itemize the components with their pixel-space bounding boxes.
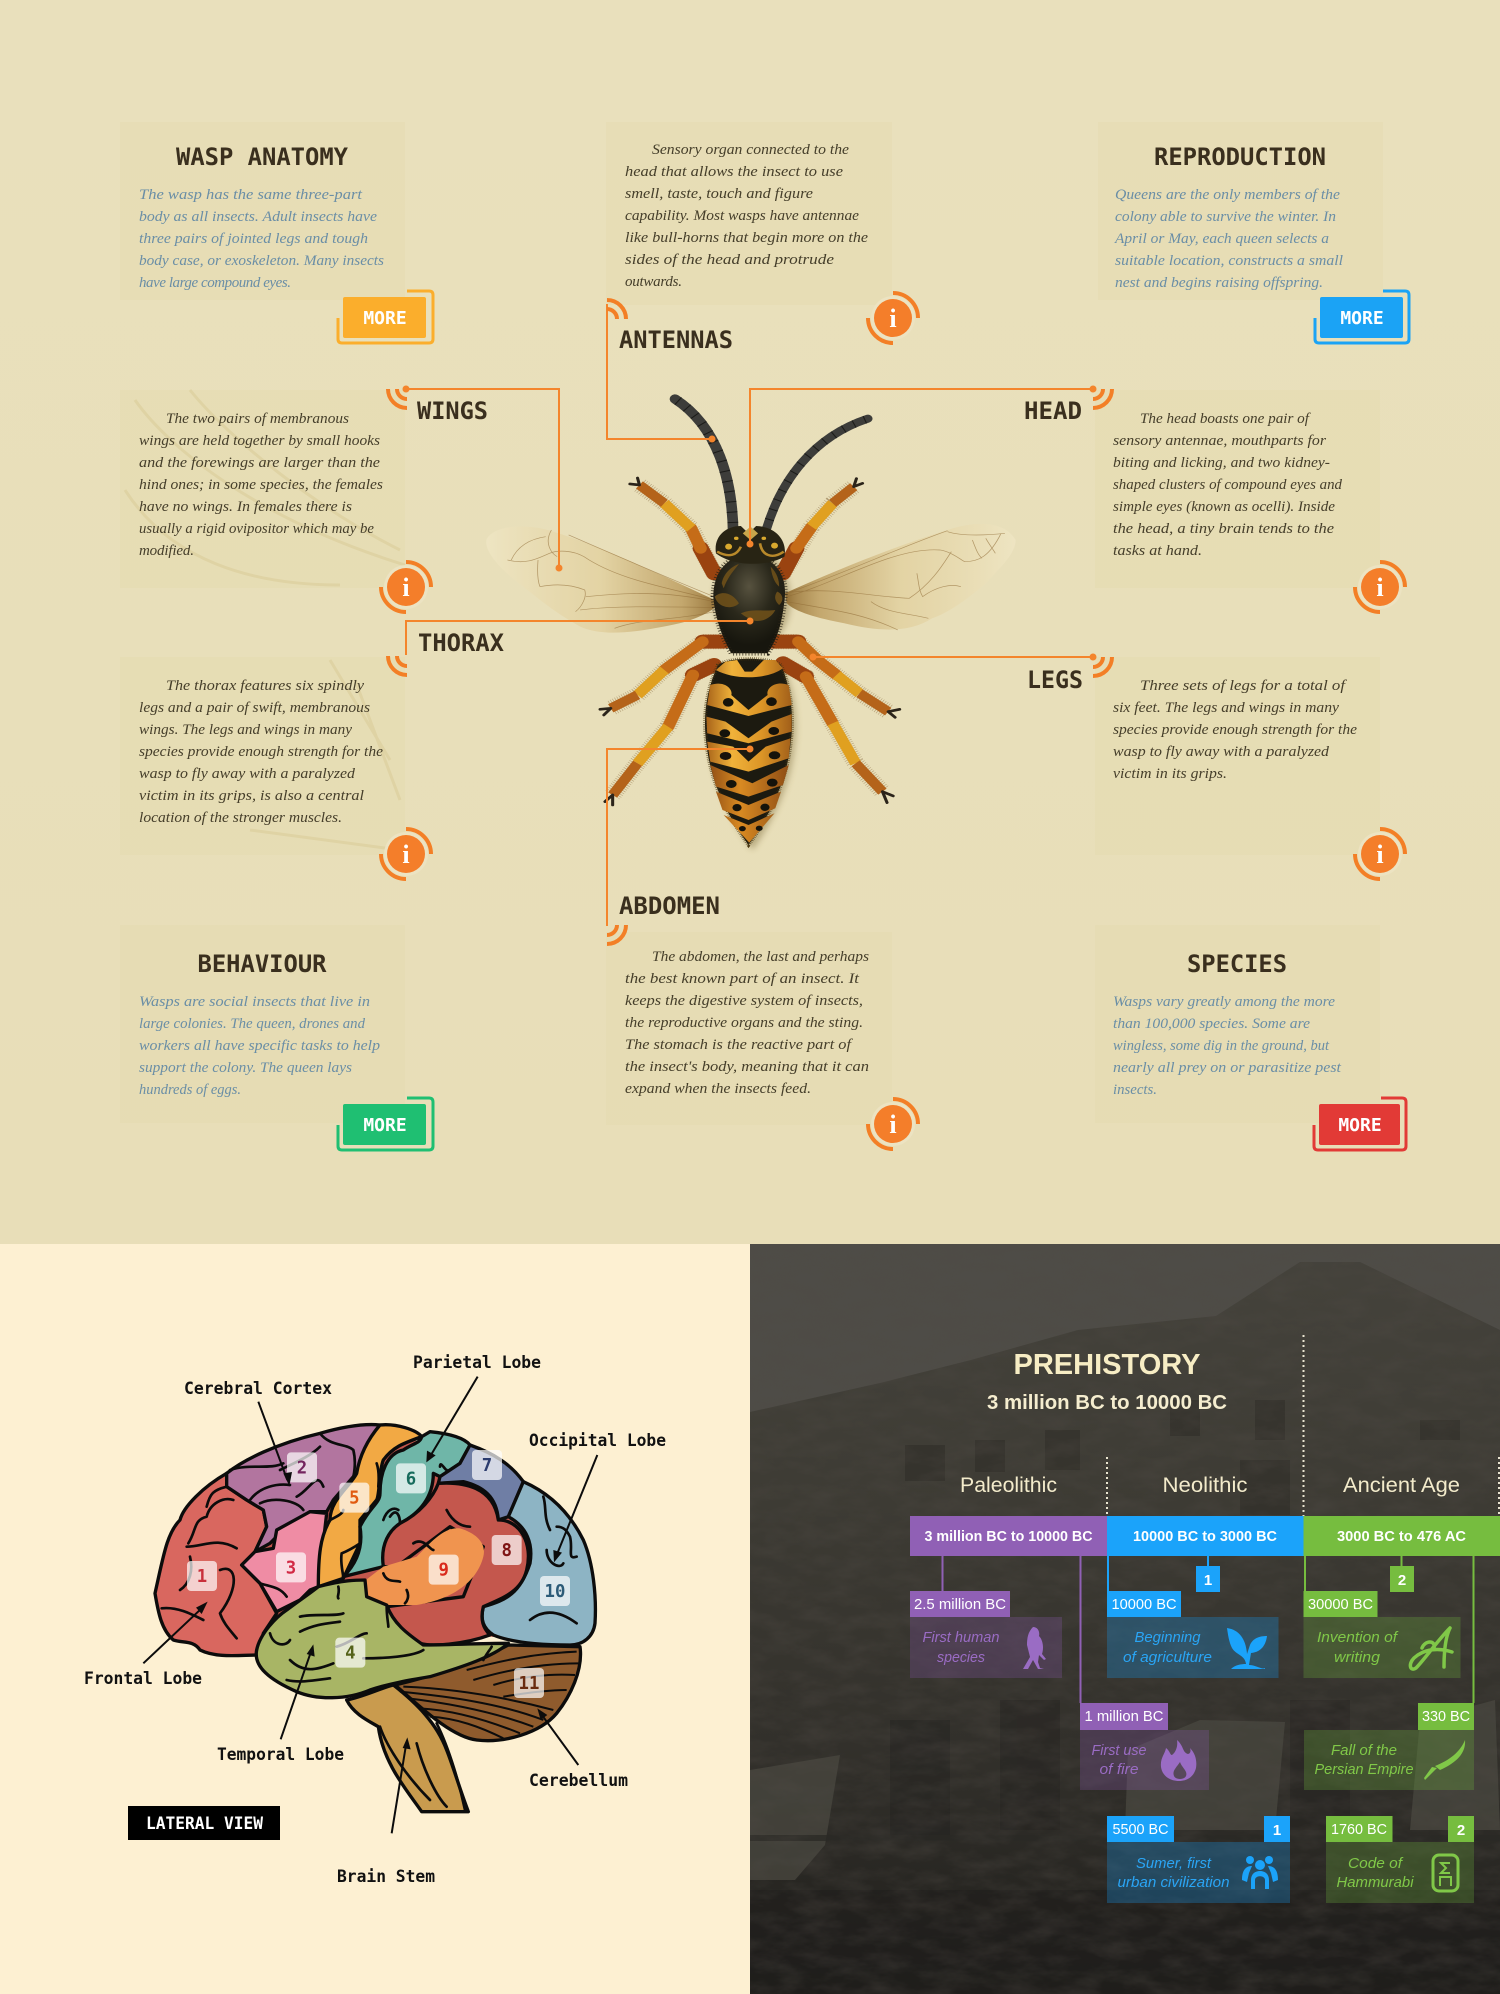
pink region: [242, 1512, 327, 1612]
text: abdomen: the reproductive organs and the sting.: [625, 1015, 863, 1031]
text: head: The head boasts one pair of: [1140, 411, 1311, 427]
head: [716, 526, 785, 564]
labels: brain parts: Occipital Lobe: [529, 1431, 666, 1450]
teal region: [343, 1432, 470, 1577]
text: species: insects.: [1113, 1082, 1157, 1098]
leader line: abdomen: [607, 746, 754, 944]
number tags: 6: [406, 1469, 416, 1489]
event: writing: 30000 BC: [1308, 1597, 1373, 1613]
text: abdomen: the insect's body, meaning that it can: [625, 1059, 869, 1075]
red parietal region: [383, 1483, 528, 1645]
labels: brain parts: Brain Stem: [337, 1867, 435, 1886]
text: antennas: smell, taste, touch and figure: [625, 186, 813, 202]
event: first human species: [910, 1591, 1062, 1678]
event: persian empire: [1304, 1703, 1474, 1790]
text: legs: victim in its grips.: [1113, 766, 1227, 782]
text: antennas: Sensory organ connected to the: [652, 142, 849, 158]
text: abdomen: the best known part of an insect. It: [625, 971, 860, 987]
text: antennas: sides of the head and protrude: [625, 252, 834, 268]
text: behaviour: Wasps are social insects that live in: [139, 994, 370, 1010]
text: abdomen: The abdomen, the last and perhaps: [652, 949, 869, 965]
text: species: nearly all prey on or parasitize pest: [1113, 1060, 1342, 1076]
icon: sword: [1424, 1740, 1465, 1780]
badge: lateral view: [128, 1806, 280, 1840]
text: thorax: victim in its grips, is also a central: [139, 788, 364, 804]
label: wings: WINGS: [417, 397, 488, 425]
illustration: wasp: [486, 399, 1016, 851]
button: more blue: MORE: [1340, 308, 1384, 329]
event: sumer: urban civilization: [1118, 1875, 1230, 1891]
event: sumer: [1107, 1816, 1290, 1903]
text: reproduction: colony able to survive the winter. In: [1115, 209, 1336, 225]
text: thorax: wings. The legs and wings in many: [139, 722, 352, 738]
event: writing: writing: [1334, 1650, 1380, 1666]
icon: head signal: [1093, 389, 1112, 408]
labels: brain parts: Frontal Lobe: [84, 1669, 202, 1688]
right wing: [785, 524, 1016, 630]
label: head: HEAD: [1024, 397, 1082, 425]
text: behaviour: workers all have specific tasks to help: [139, 1038, 381, 1054]
label: abdomen: ABDOMEN: [619, 892, 720, 920]
number box 1b: [1264, 1816, 1290, 1842]
slate region: [438, 1445, 523, 1520]
icon: info head: [1355, 562, 1405, 612]
icon: info antennas: i: [889, 304, 897, 333]
green temporal region: [256, 1580, 508, 1698]
labels: brain parts: Cerebral Cortex: [184, 1379, 332, 1398]
event: first human species: First human: [922, 1630, 1000, 1646]
icon: info legs: [1355, 829, 1405, 879]
text: wings: modified.: [139, 543, 194, 559]
leader line: thorax: [388, 618, 754, 675]
icon: info abdomen: i: [889, 1110, 897, 1139]
icon: info abdomen: [868, 1099, 918, 1149]
number box 1: 1: [1204, 1572, 1212, 1589]
button: more orange: [338, 291, 433, 343]
event: writing: [1304, 1591, 1460, 1678]
event: hammurabi: 1760 BC: [1331, 1822, 1387, 1838]
icon: info thorax: i: [402, 840, 410, 869]
text: wings: and the forewings are larger than the: [139, 455, 380, 471]
heading: wasp anatomy: WASP ANATOMY: [176, 143, 349, 171]
icon: legs signal: [1093, 657, 1112, 676]
number box 2: 2: [1398, 1572, 1406, 1589]
number tags: 4: [345, 1644, 356, 1664]
text: legs: six feet. The legs and wings in many: [1113, 700, 1339, 716]
panel: wings text card: [120, 390, 405, 588]
text: head: biting and licking, and two kidney-: [1113, 455, 1330, 471]
event: hammurabi: [1326, 1816, 1474, 1903]
timeline: neolithic: 10000 BC to 3000 BC: [1133, 1529, 1278, 1545]
text: behaviour: support the colony. The queen lays: [139, 1060, 352, 1076]
text: behaviour: [139, 994, 381, 1098]
heading: species: SPECIES: [1187, 950, 1287, 978]
text: wasp anatomy intro: body case, or exoskeleton. Many insects: [139, 253, 384, 269]
text: species: [1113, 994, 1342, 1098]
number box 2b: 2: [1457, 1822, 1465, 1839]
timeline: paleolithic: [910, 1516, 1209, 1790]
number tags: [187, 1450, 570, 1698]
button: more green: MORE: [363, 1115, 407, 1136]
number tags: 5: [349, 1489, 360, 1509]
button: more red: [1314, 1098, 1406, 1150]
heading: reproduction: REPRODUCTION: [1154, 143, 1326, 171]
button: more green: [338, 1098, 433, 1150]
label: thorax: THORAX: [418, 629, 505, 657]
brain stem: [347, 1685, 468, 1812]
left wing: [486, 526, 716, 633]
text: abdomen: expand when the insects feed.: [625, 1081, 811, 1097]
event: hammurabi: Hammurabi: [1336, 1875, 1414, 1891]
panel: brain background: [0, 1244, 750, 1994]
labels: brain parts: [84, 1353, 666, 1886]
text: wings: The two pairs of membranous: [166, 411, 349, 427]
text: thorax: The thorax features six spindly: [166, 678, 364, 694]
subheading: date range: 3 million BC to 10000 BC: [987, 1392, 1227, 1414]
panel: prehistory background: [750, 1244, 1500, 1994]
abdomen: [705, 659, 792, 845]
number box 2: [1390, 1566, 1414, 1592]
icon: people: [1242, 1856, 1278, 1889]
text: head: simple eyes (known as ocelli). Inside: [1113, 499, 1335, 515]
panel: reproduction card: [1098, 122, 1409, 343]
illustration: brain: [143, 1377, 597, 1833]
text: reproduction: April or May, each queen selects a: [1114, 231, 1329, 247]
number tags: 3: [286, 1558, 296, 1578]
event: first use of fire: of fire: [1100, 1762, 1138, 1778]
event: sumer: Sumer, first: [1136, 1856, 1212, 1872]
thorax: [713, 555, 785, 653]
icon: tablet: [1433, 1855, 1458, 1891]
event: hammurabi: Code of: [1348, 1856, 1404, 1872]
icon: thorax signal: [388, 656, 407, 675]
icon: human: [1023, 1627, 1046, 1669]
text: head: sensory antennae, mouthparts for: [1113, 433, 1326, 449]
button: more red: MORE: [1338, 1115, 1382, 1136]
number tags: 1: [197, 1567, 207, 1587]
heading: prehistory: PREHISTORY: [1014, 1349, 1200, 1381]
text: head: the head, a tiny brain tends to the: [1113, 521, 1334, 537]
leader line: wings: [388, 386, 562, 572]
text: species: than 100,000 species. Some are: [1113, 1016, 1310, 1032]
text: behaviour: hundreds of eggs.: [139, 1082, 241, 1098]
event: first human species: 2.5 million BC: [914, 1597, 1006, 1613]
text: antennas: [625, 142, 868, 290]
label: antennas: ANTENNAS: [619, 326, 733, 354]
panel: behaviour card: [120, 925, 433, 1150]
panel: abdomen text card: [606, 932, 892, 1125]
event: first use of fire: First use: [1092, 1743, 1146, 1759]
dotted era dividers: [1107, 1335, 1499, 1516]
text: abdomen: [625, 949, 869, 1097]
number tags: 11: [519, 1674, 539, 1694]
cerebrum base: [163, 1427, 593, 1687]
panel: wasp anatomy background: [0, 0, 1500, 1244]
text: wasp anatomy intro: body as all insects. Adult insects have: [139, 209, 377, 225]
icon: flame: [1161, 1740, 1196, 1781]
timeline: ancient age: [1304, 1516, 1500, 1903]
era headings: Ancient Age: [1343, 1474, 1460, 1497]
number tags: 2: [297, 1458, 307, 1478]
event: first use of fire: [1080, 1703, 1209, 1790]
text: antennas: outwards.: [625, 274, 682, 290]
label: legs: LEGS: [1027, 666, 1083, 694]
leader line: legs: [810, 654, 1112, 676]
text: legs: [1113, 678, 1357, 782]
button: more blue: [1315, 291, 1409, 343]
event: persian empire: Fall of the: [1331, 1743, 1397, 1759]
text: wasp anatomy intro: The wasp has the same three-part: [139, 187, 363, 203]
icon: info wings: [381, 562, 431, 612]
icon: info wings: i: [402, 573, 410, 602]
era headings: [960, 1474, 1460, 1497]
text: wings: usually a rigid ovipositor which may be: [139, 521, 374, 537]
legs: [600, 478, 900, 805]
text: head: tasks at hand.: [1113, 543, 1202, 559]
event: agriculture: 10000 BC: [1112, 1597, 1176, 1613]
text: wasp anatomy intro: three pairs of jointed legs and tough: [139, 231, 368, 247]
text: reproduction: Queens are the only members of the: [1115, 187, 1340, 203]
wasp shadow: [709, 550, 796, 851]
number tags: 9: [438, 1561, 449, 1581]
text: abdomen: keeps the digestive system of insects,: [625, 993, 863, 1009]
brain folds: [162, 1433, 577, 1810]
text: antennas: head that allows the insect to use: [625, 164, 843, 180]
text: reproduction: suitable location, constructs a small: [1115, 253, 1343, 269]
orange region lower: [365, 1528, 484, 1605]
heading: behaviour: BEHAVIOUR: [198, 950, 327, 978]
timeline: ancient age: 3000 BC to 476 AC: [1337, 1529, 1467, 1545]
text: legs: Three sets of legs for a total of: [1140, 678, 1347, 694]
text: legs: species provide enough strength for the: [1113, 722, 1357, 738]
labels: brain parts: Temporal Lobe: [217, 1745, 344, 1764]
text: abdomen: The stomach is the reactive part of: [625, 1037, 853, 1053]
text: head: [1113, 411, 1342, 559]
labels: brain parts: Cerebellum: [529, 1771, 628, 1790]
text: antennas: capability. Most wasps have antennae: [625, 208, 859, 224]
text: wasp anatomy intro: have large compound eyes.: [139, 275, 291, 291]
panel: head text card: [1095, 390, 1380, 588]
panel: legs text card: [1095, 657, 1380, 855]
text: thorax: [139, 678, 383, 826]
text: thorax: wasp to fly away with a paralyzed: [139, 766, 356, 782]
event: agriculture: [1107, 1591, 1278, 1678]
antennas: [675, 399, 868, 533]
era headings: Paleolithic: [960, 1474, 1057, 1497]
panel: species card: [1095, 925, 1406, 1150]
number box 1b: 1: [1273, 1822, 1281, 1839]
icon: info legs: i: [1376, 840, 1384, 869]
icon: info head: i: [1376, 573, 1384, 602]
event: agriculture: of agriculture: [1123, 1650, 1212, 1666]
icon: wings signal: [388, 389, 407, 408]
cerebellum: [395, 1645, 581, 1741]
arrows: [143, 1377, 597, 1833]
panel: wasp anatomy card: [120, 122, 433, 343]
button: more orange: MORE: [363, 308, 407, 329]
number tags: 8: [501, 1541, 512, 1561]
event: sumer: 5500 BC: [1112, 1822, 1168, 1838]
text: behaviour: large colonies. The queen, drones and: [139, 1016, 365, 1032]
text: legs: wasp to fly away with a paralyzed: [1113, 744, 1330, 760]
event: writing: Invention of: [1317, 1630, 1399, 1646]
leader line: head: [746, 386, 1112, 548]
number tags: 10: [545, 1582, 565, 1602]
icon: info thorax: [381, 829, 431, 879]
light blue occipital region: [482, 1482, 595, 1645]
text: antennas: like bull-horns that begin more on the: [625, 230, 868, 246]
text: wings: hind ones; in some species, the females: [139, 477, 383, 493]
text: wings: [139, 411, 383, 559]
icon: abdomen signal: [607, 925, 626, 944]
icon: sprout: [1227, 1628, 1267, 1669]
event: persian empire: Persian Empire: [1314, 1762, 1414, 1778]
labels: brain parts: Parietal Lobe: [413, 1353, 541, 1372]
number tags: 7: [482, 1456, 492, 1476]
event: first use of fire: 1 million BC: [1084, 1709, 1164, 1725]
era headings: Neolithic: [1162, 1474, 1248, 1497]
icon: antennas signal: [607, 300, 626, 319]
panel: thorax text card: [120, 657, 405, 855]
orange region: [318, 1425, 422, 1587]
event: agriculture: Beginning: [1134, 1630, 1200, 1646]
number box 2b: [1448, 1816, 1474, 1842]
text: wings: wings are held together by small hooks: [139, 433, 380, 449]
text: reproduction: nest and begins raising offspring.: [1115, 275, 1323, 291]
event: persian empire: 330 BC: [1422, 1709, 1470, 1725]
text: species: Wasps vary greatly among the more: [1113, 994, 1335, 1010]
timeline: neolithic: [1107, 1516, 1304, 1903]
purple region: [227, 1425, 380, 1552]
icon: info antennas: [868, 293, 918, 343]
text: wasp anatomy intro: [139, 187, 384, 291]
leader line: antennas: [607, 300, 716, 442]
text: thorax: location of the stronger muscles.: [139, 810, 342, 826]
text: thorax: species provide enough strength for the: [139, 744, 383, 760]
text: wings: have no wings. In females there is: [139, 499, 352, 515]
event: first human species: species: [937, 1650, 985, 1666]
icon: letter A: [1410, 1628, 1452, 1669]
text: reproduction: [1114, 187, 1343, 291]
text: thorax: legs and a pair of swift, membranous: [139, 700, 370, 716]
text: head: shaped clusters of compound eyes and: [1113, 477, 1342, 493]
text: species: wingless, some dig in the ground, but: [1113, 1038, 1330, 1054]
badge: lateral view: LATERAL VIEW: [146, 1814, 263, 1833]
number box 1: [1196, 1566, 1220, 1592]
timeline: paleolithic: 3 million BC to 10000 BC: [924, 1529, 1093, 1545]
frontal lobe region: [155, 1473, 277, 1656]
panel: antennas text card: [606, 122, 892, 305]
